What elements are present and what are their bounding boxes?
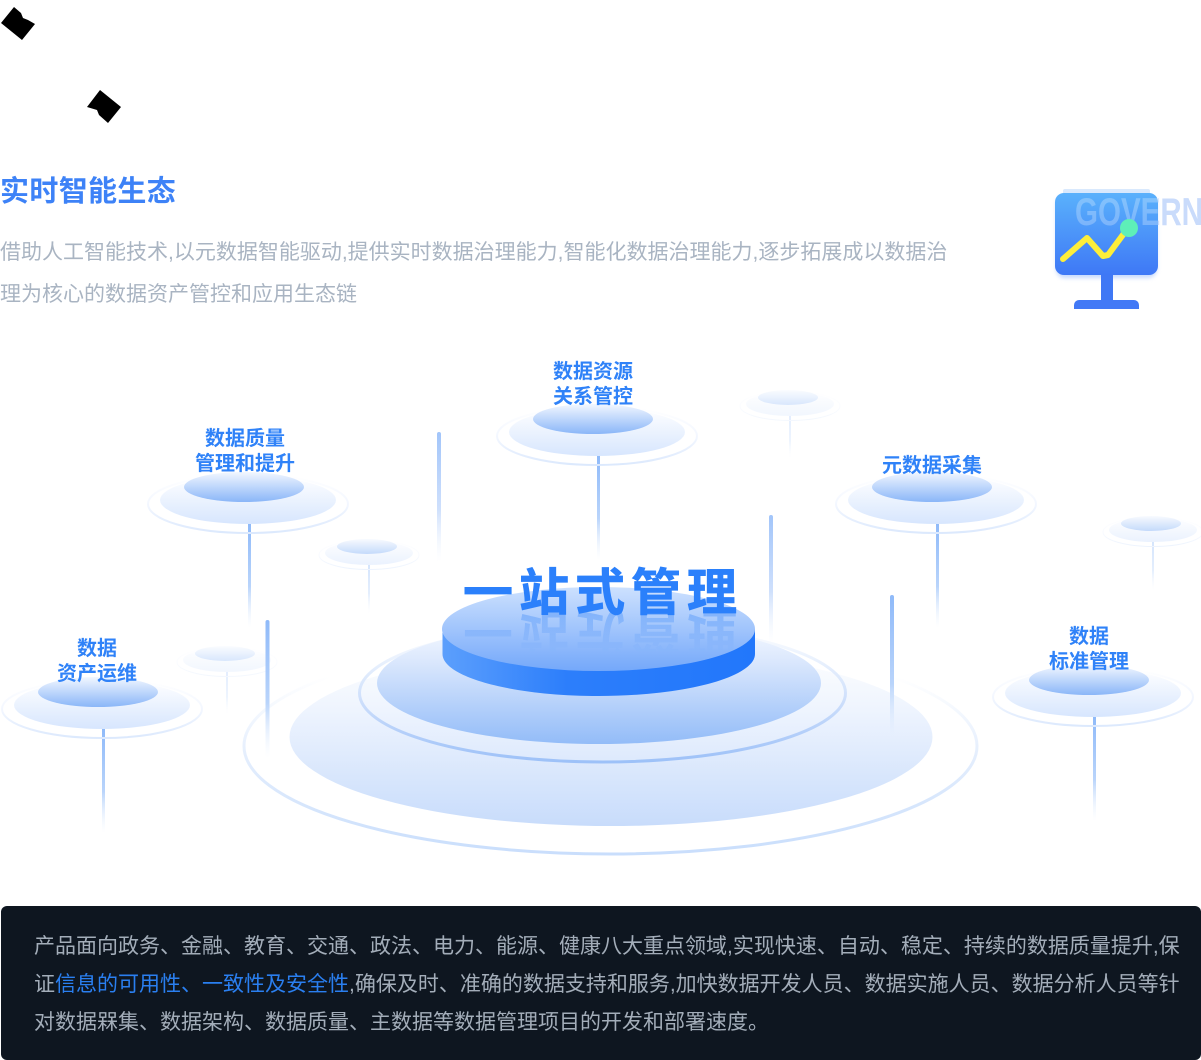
platform: data asset operations: 数据 [77,637,117,660]
central title: 一站式管理 [463,565,743,621]
platform: data quality: 管理和提升 [195,452,295,475]
intro text block [0,241,947,306]
platform: faint small lower left [177,646,277,714]
platform: data asset operations [2,637,202,833]
platform: data standards [993,625,1193,821]
intro text block: 理为核心的数据资产管控和应用生态链 [0,283,357,306]
platform: metadata collection: 元数据采集 [882,454,982,477]
vertical light bars [266,432,894,758]
platform: data resource relations: 数据资源 [553,360,633,383]
heading: 实时智能生态 [0,176,176,208]
platform: data standards: 标准管理 [1049,650,1129,673]
platform: data quality [148,427,348,628]
intro text block: 借助人工智能技术,以元数据智能驱动,提供实时数据治理能力,智能化数据治理能力,逐步拓展成以数据治 [0,241,947,264]
platform: data standards: 数据 [1069,625,1109,648]
icon: black diamond lower [87,90,121,123]
icon: black diamond top [1,7,35,40]
icon: monitor with rising chart [1055,189,1201,316]
central stacked disc platform [244,587,977,854]
platform: data resource relations: 关系管控 [553,385,633,408]
platform: data quality: 数据质量 [205,427,285,450]
description text: 产品面向政务、金融、教育、交通、政法、电力、能源、健康八大重点领域,实现快速、自动、稳定、持续的数据质量提升,保 [34,935,1180,958]
description text: 对数据槑集、数据架构、数据质量、主数据等数据管理项目的开发和部署速度。 [34,1011,769,1034]
platform: faint small top right [740,390,840,458]
platform: faint small left [319,539,419,613]
panel: bottom description [1,906,1201,1060]
description text [34,934,1180,1034]
platform: faint small far right [1103,516,1201,590]
platform: metadata collection [836,454,1036,628]
description text: 证信息的可用性、一致性及安全性,确保及时、准确的数据支持和服务,加快数据开发人员、数据实施人员、数据分析人员等针 [34,973,1180,996]
platform: data resource relations [497,360,697,560]
platform: data asset operations: 资产运维 [57,662,137,685]
central title reflection: 一站式管理 [463,603,743,659]
